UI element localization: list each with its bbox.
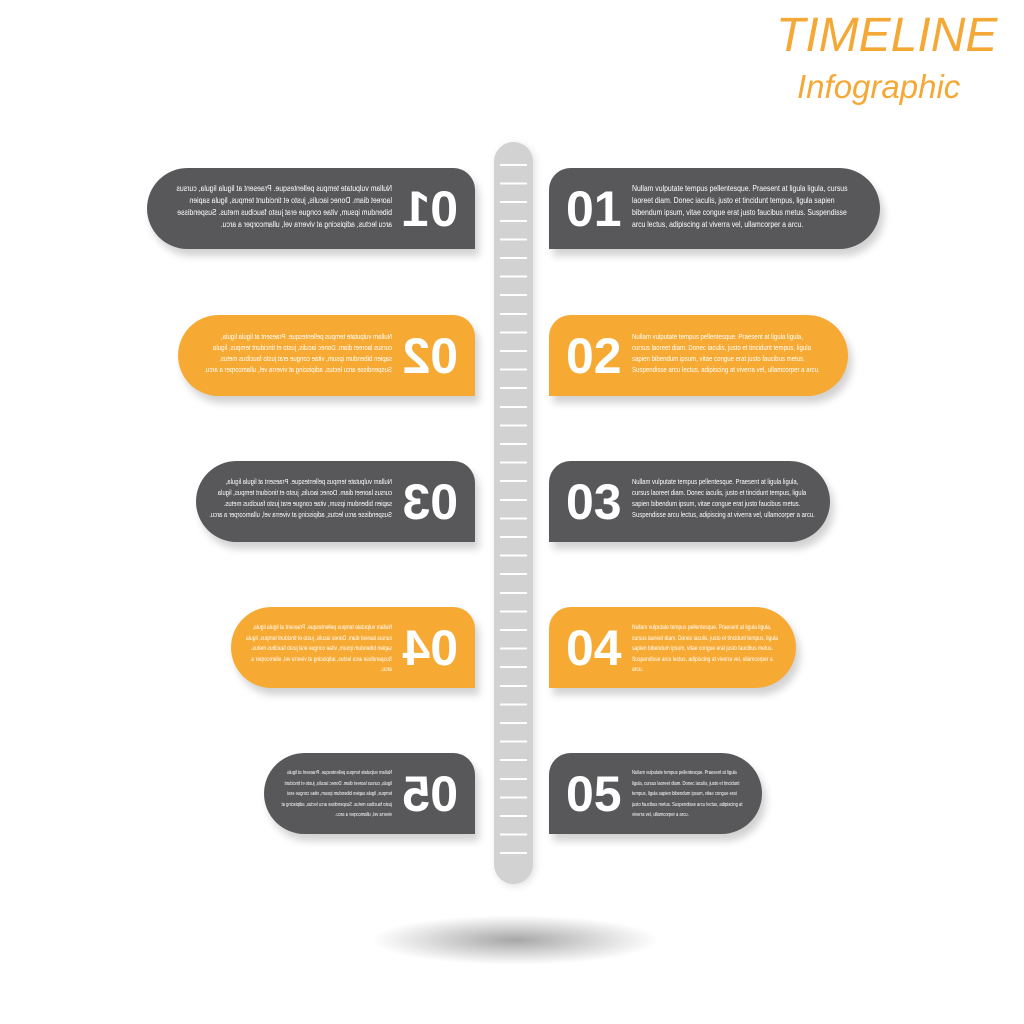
panel: right 03 <box>549 461 830 542</box>
panel: left 02: 02 <box>402 328 458 384</box>
panel: right 03: Nullam vulputate tempus pellentesque. Praesent at ligula ligula, cursus laoreet diam. Donec iaculis, justo et tincidunt tempus, ligula sapien bibendum ipsum, vitae congue erat justo faucibus metus. Suspendisse arcu lectus, adipiscing at viverra vel, ullamcorper a arcu. <box>632 477 815 519</box>
title: TIMELINE <box>776 9 997 62</box>
panel: right 04: 04 <box>566 620 622 676</box>
subtitle: Infographic <box>797 68 960 105</box>
panel: right 03: 03 <box>566 474 622 530</box>
panel: left 04: 04 <box>402 620 458 676</box>
panel: right 04: Nullam vulputate tempus pellentesque. Praesent at ligula ligula, cursus laoreet diam. Donec iaculis, justo et tincidunt tempus, ligula sapien bibendum ipsum, vitae congue erat justo faucibus metus. Suspendisse arcu lectus, adipiscing at viverra vel, ullamcorper a arcu. <box>632 624 778 673</box>
panel: left 01: Nullam vulputate tempus pellentesque. Praesent at ligula ligula, cursus laoreet diam. Donec iaculis, justo et tincidunt tempus, ligula sapien bibendum ipsum, vitae congue erat justo faucibus metus. Suspendisse arcu lectus, adipiscing at viverra vel, ullamcorper a arcu. <box>176 183 392 229</box>
panel: left 03: Nullam vulputate tempus pellentesque. Praesent at ligula ligula, cursus laoreet diam. Donec iaculis, justo et tincidunt tempus, ligula sapien bibendum ipsum, vitae congue erat justo faucibus metus. Suspendisse arcu lectus, adipiscing at viverra vel, ullamcorper a arcu. <box>209 477 392 519</box>
floor shadow <box>370 915 660 965</box>
panel: left 04: Nullam vulputate tempus pellentesque. Praesent at ligula ligula, cursus laoreet diam. Donec iaculis, justo et tincidunt tempus, ligula sapien bibendum ipsum, vitae congue erat justo faucibus metus. Suspendisse arcu lectus, adipiscing at viverra vel, ullamcorper a arcu. <box>246 624 392 673</box>
panel: right 04 <box>549 607 796 688</box>
panel: right 02: Nullam vulputate tempus pellentesque. Praesent at ligula ligula, cursus laoreet diam. Donec iaculis, justo et tincidunt tempus, ligula sapien bibendum ipsum, vitae congue erat justo faucibus metus. Suspendisse arcu lectus, adipiscing at viverra vel, ullamcorper a arcu. <box>632 332 820 374</box>
panel: right 01: 01 <box>566 181 622 237</box>
panel: right 01 <box>549 168 880 249</box>
panel: left 01: 01 <box>402 181 458 237</box>
timeline ruler bar <box>494 142 533 884</box>
panel: left 03: 03 <box>402 474 458 530</box>
panel: left 03 <box>196 461 475 542</box>
panel: left 02 <box>178 315 475 396</box>
panel: right 05: 05 <box>566 766 622 822</box>
panel: left 05 <box>264 753 475 834</box>
panel: left 04 <box>231 607 475 688</box>
panel: right 05: Nullam vulputate tempus pellentesque. Praesent at ligula ligula, cursus laoreet diam. Donec iaculis, justo et tincidunt tempus, ligula sapien bibendum ipsum, vitae congue erat justo faucibus metus. Suspendisse arcu lectus, adipiscing at viverra vel, ullamcorper a arcu. <box>632 770 742 818</box>
panel: left 05: Nullam vulputate tempus pellentesque. Praesent at ligula ligula, cursus laoreet diam. Donec iaculis, justo et tincidunt tempus, ligula sapien bibendum ipsum, vitae congue erat justo faucibus metus. Suspendisse arcu lectus, adipiscing at viverra vel, ullamcorper a arcu. <box>282 770 392 818</box>
panel: right 05 <box>549 753 762 834</box>
panel: right 02 <box>549 315 848 396</box>
panel: left 02: Nullam vulputate tempus pellentesque. Praesent at ligula ligula, cursus laoreet diam. Donec iaculis, justo et tincidunt tempus, ligula sapien bibendum ipsum, vitae congue erat justo faucibus metus. Suspendisse arcu lectus, adipiscing at viverra vel, ullamcorper a arcu. <box>204 332 392 374</box>
panel: right 02: 02 <box>566 328 622 384</box>
panel: left 05: 05 <box>402 766 458 822</box>
panel: left 01 <box>147 168 475 249</box>
panel: right 01: Nullam vulputate tempus pellentesque. Praesent at ligula ligula, cursus laoreet diam. Donec iaculis, justo et tincidunt tempus, ligula sapien bibendum ipsum, vitae congue erat justo faucibus metus. Suspendisse arcu lectus, adipiscing at viverra vel, ullamcorper a arcu. <box>632 183 848 229</box>
